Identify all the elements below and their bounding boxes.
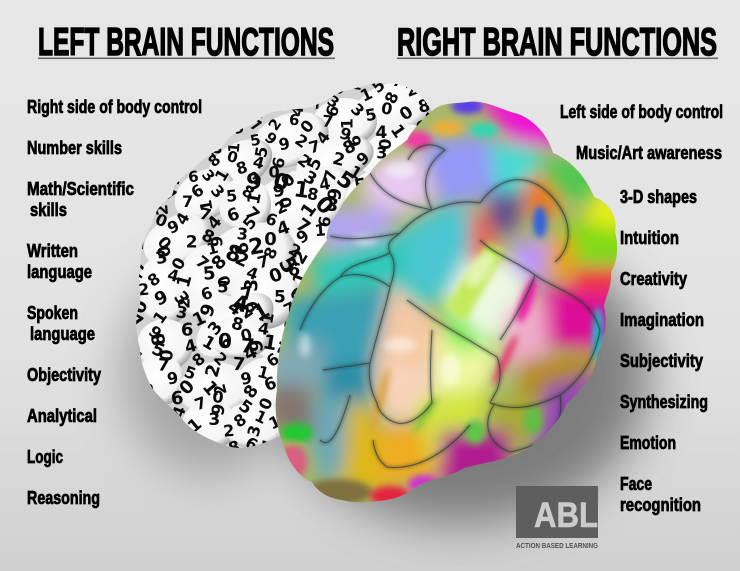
left brain function list: Spoken — [27, 303, 78, 323]
broad colour fields — [266, 85, 630, 490]
large numerals — [218, 166, 358, 358]
numerals: 3958260417395082164739285 — [130, 157, 538, 415]
numerals: 2735684019265730184926384 — [58, 15, 419, 245]
right brain function list: Synthesizing — [620, 392, 708, 412]
numerals: 9132650478291635047182906 — [133, 109, 510, 349]
numerals: 8470291635847019263580417 — [153, 192, 550, 445]
numerals: 7041382956170342869510743 — [144, 140, 531, 387]
right brain function list: Creativity — [620, 269, 687, 289]
title: left brain functions: LEFT BRAIN FUNCTIONS — [38, 21, 334, 64]
right brain function list: Intuition — [620, 228, 679, 248]
lobes — [135, 72, 442, 449]
fine colour accents — [279, 98, 603, 506]
large numerals: 825417 — [222, 234, 309, 332]
left brain function list: skills — [30, 200, 67, 220]
numerals: 5728104936572810493657281 — [180, 218, 578, 470]
right brain function list: 3-D shapes — [620, 187, 697, 207]
brain shadow — [120, 225, 650, 525]
numerals: 4709315826047139582064173 — [99, 90, 506, 349]
numerals: 0863175249086317524908631 — [198, 238, 579, 481]
glossy highlights — [299, 162, 499, 386]
right brain function list: Imagination — [620, 310, 704, 330]
numerals: 6284071935620847193056421 — [104, 82, 483, 324]
large numerals: 0710 — [218, 318, 301, 358]
left brain function list: Right side of body control — [27, 97, 202, 117]
right brain function list: recognition — [620, 495, 701, 515]
logo: Action Based Learning — [516, 486, 598, 550]
right brain function list: Subjectivity — [620, 351, 703, 371]
numerals: 7093128564017926358401725 — [63, 6, 399, 220]
numerals: 1395860724913586072491358 — [180, 202, 569, 450]
right brain function list: Emotion — [620, 433, 676, 453]
numerals: 1957302846719035286410859 — [84, 65, 476, 315]
large numerals: 90105 — [245, 166, 358, 220]
left brain function list: Reasoning — [27, 488, 100, 508]
numerals: 3491706258349170625834917 — [204, 256, 585, 498]
right hemisphere: multicolour painted brain — [276, 102, 618, 502]
numerals: 2586194730625819407362518 — [119, 120, 528, 381]
logo: Action Based Learning: ACTION BASED LEARNING — [516, 541, 598, 550]
gyri folds — [300, 145, 600, 468]
left brain function list: Analytical — [27, 406, 97, 426]
left hemisphere: white with black numbers — [136, 83, 432, 448]
logo: Action Based Learning: ABL — [534, 496, 598, 535]
left brain function list: language — [27, 262, 92, 282]
right brain function list — [560, 102, 723, 515]
left brain function list: Objectivity — [27, 365, 101, 385]
numerals — [136, 83, 430, 448]
left brain function list: Math/Scientific — [27, 179, 134, 199]
left brain function list: Number skills — [27, 138, 122, 158]
left brain function list: language — [30, 324, 95, 344]
numerals: 8415902763184592076315740 — [73, 40, 447, 278]
left brain function list: Logic — [27, 447, 63, 467]
numerals: 6012749385106274938516029 — [158, 164, 562, 421]
fold shadows — [300, 145, 600, 468]
numerals: 3620947158306274915082637 — [100, 43, 477, 283]
left brain function list — [27, 97, 202, 508]
right brain function list: Face — [620, 474, 652, 494]
left brain function list: Written — [27, 241, 78, 261]
numerals: 5029174638015926473810592 — [88, 35, 420, 247]
